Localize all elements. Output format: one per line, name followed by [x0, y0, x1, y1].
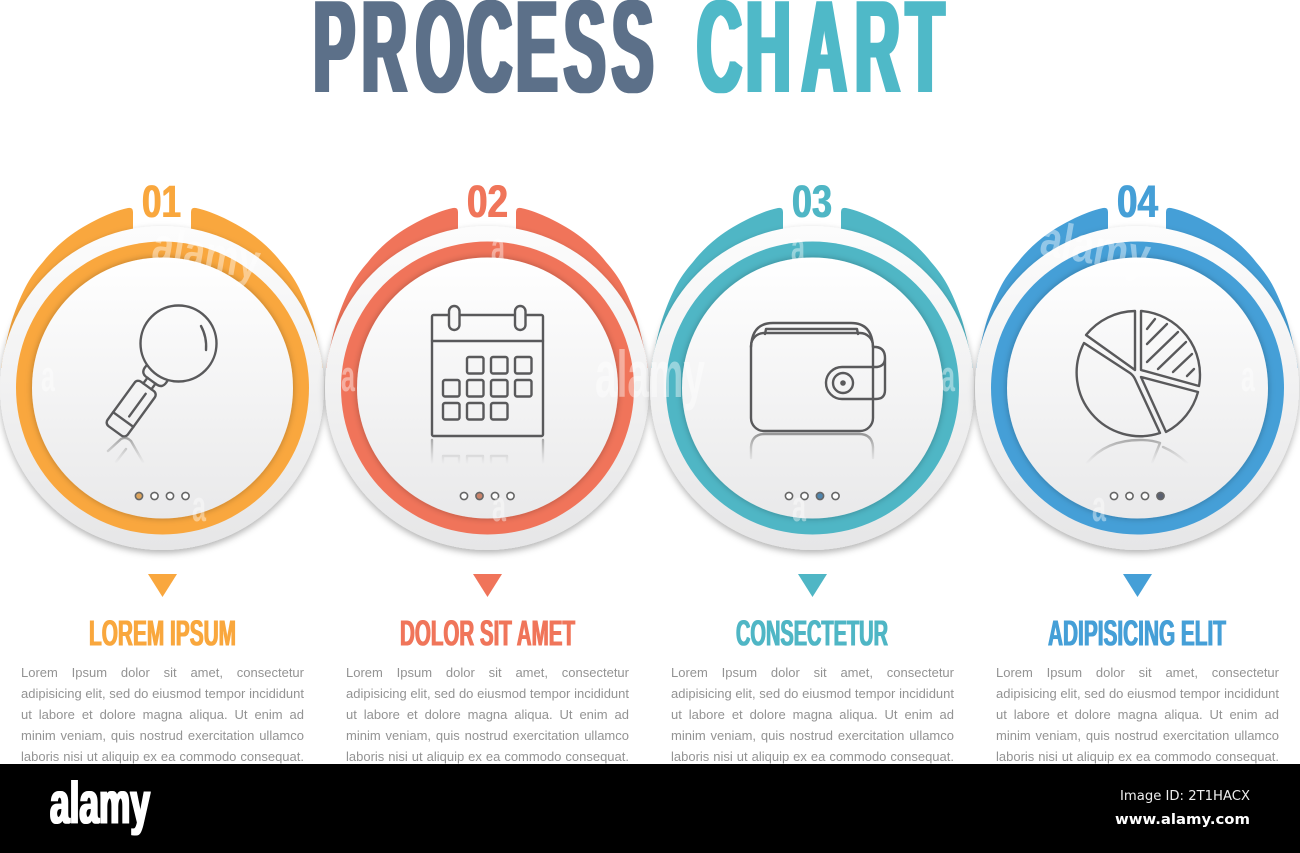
- text block: step 2: Lorem Ipsum dolor sit amet, consectetur: [346, 665, 629, 680]
- progress dots: [460, 492, 514, 500]
- text block: step 3: Lorem Ipsum dolor sit amet, consectetur: [671, 665, 954, 680]
- outer disc: [0, 226, 324, 550]
- icon: calendar: [432, 306, 543, 436]
- text block: step 2: adipisicing elit, sed do eiusmod tempor incididunt: [346, 686, 629, 701]
- pointer triangle: [1123, 574, 1152, 597]
- text block: step 4: ut labore et dolore magna aliqua. Ut enim ad: [996, 707, 1279, 722]
- text block: step 2: minim veniam, quis nostrud exercitation ullamco: [346, 728, 629, 743]
- pointer triangle: [473, 574, 502, 597]
- heading: LOREM IPSUM: [89, 612, 236, 654]
- website: www.alamy.com: [1115, 812, 1250, 828]
- text block: step 2: laboris nisi ut aliquip ex ea commodo consequat.: [346, 749, 629, 764]
- text block: step 1: Lorem Ipsum dolor sit amet, consectetur: [21, 665, 304, 680]
- coloured ring: [16, 242, 309, 534]
- number 01: 01: [142, 176, 181, 227]
- panel: step 1: [0, 176, 324, 654]
- icon reflection: [1087, 440, 1187, 463]
- top arc accent: [326, 208, 648, 368]
- coloured ring: [341, 242, 634, 534]
- heading: DOLOR SIT AMET: [400, 612, 575, 654]
- text block: step 1: ut labore et dolore magna aliqua. Ut enim ad: [21, 707, 304, 722]
- coloured ring: [666, 242, 959, 534]
- text block: step 1: [21, 665, 304, 764]
- watermarks: a: [791, 223, 805, 272]
- number 03: 03: [792, 176, 832, 227]
- text block: step 3: minim veniam, quis nostrud exercitation ullamco: [671, 728, 954, 743]
- icon reflection: [108, 438, 143, 462]
- watermarks: a: [1241, 352, 1255, 401]
- watermarks: [41, 210, 1255, 531]
- number 04: 04: [1117, 176, 1158, 227]
- panel: step 3: [650, 176, 974, 654]
- watermarks: alamy: [148, 216, 265, 290]
- outer disc: [650, 226, 974, 550]
- top arc accent: [651, 208, 973, 368]
- icon: pie chart: [1077, 311, 1200, 436]
- text block: step 1: adipisicing elit, sed do eiusmod tempor incididunt: [21, 686, 304, 701]
- icon: wallet: [751, 323, 885, 431]
- inner disc: [357, 258, 618, 518]
- watermarks: alamy: [595, 337, 705, 411]
- watermarks: a: [492, 482, 506, 531]
- icon: magnifying glass: [104, 306, 216, 439]
- footer bar: [0, 764, 1300, 853]
- number 02: 02: [467, 176, 508, 227]
- text block: step 3: ut labore et dolore magna aliqua. Ut enim ad: [671, 707, 954, 722]
- outer disc: [325, 226, 649, 550]
- text block: step 4: laboris nisi ut aliquip ex ea commodo consequat.: [996, 749, 1279, 764]
- text block: step 4: [996, 665, 1279, 764]
- text block: step 3: [671, 665, 954, 764]
- inner disc: [682, 258, 943, 518]
- icon reflection: [751, 434, 873, 458]
- top arc accent: [1, 208, 323, 368]
- pointer triangle: [148, 574, 177, 597]
- progress dots: [135, 492, 189, 500]
- image id: Image ID: 2T1HACX: [1120, 789, 1250, 804]
- watermarks: a: [941, 352, 955, 401]
- text block: step 2: [346, 665, 629, 764]
- panel: step 2: [325, 176, 649, 654]
- text block: step 1: laboris nisi ut aliquip ex ea commodo consequat.: [21, 749, 304, 764]
- text block: step 2: ut labore et dolore magna aliqua. Ut enim ad: [346, 707, 629, 722]
- heading: CONSECTETUR: [736, 612, 888, 654]
- coloured ring: [991, 242, 1284, 534]
- progress dots: [785, 492, 839, 500]
- watermarks: a: [192, 482, 206, 531]
- watermarks: alamy: [1036, 210, 1155, 284]
- outer disc: [975, 226, 1299, 550]
- footer logo: alamy: [50, 771, 150, 836]
- text block: step 4: minim veniam, quis nostrud exercitation ullamco: [996, 728, 1279, 743]
- top arc accent: [976, 208, 1298, 368]
- watermarks: a: [341, 352, 355, 401]
- inner disc: [32, 258, 293, 518]
- text block: step 3: adipisicing elit, sed do eiusmod tempor incididunt: [671, 686, 954, 701]
- progress dots: [1110, 492, 1164, 500]
- watermarks: a: [491, 223, 505, 272]
- text block: step 4: Lorem Ipsum dolor sit amet, consectetur: [996, 665, 1279, 680]
- title: [313, 0, 944, 120]
- text block: step 3: laboris nisi ut aliquip ex ea commodo consequat.: [671, 749, 954, 764]
- text block: step 1: minim veniam, quis nostrud exercitation ullamco: [21, 728, 304, 743]
- pointer triangle: [798, 574, 827, 597]
- icon reflection: [432, 440, 543, 464]
- text block: step 4: adipisicing elit, sed do eiusmod tempor incididunt: [996, 686, 1279, 701]
- watermarks: a: [1092, 482, 1106, 531]
- watermarks: a: [792, 482, 806, 531]
- inner disc: [1007, 258, 1268, 518]
- watermarks: a: [41, 352, 55, 401]
- panel: step 4: [975, 176, 1299, 654]
